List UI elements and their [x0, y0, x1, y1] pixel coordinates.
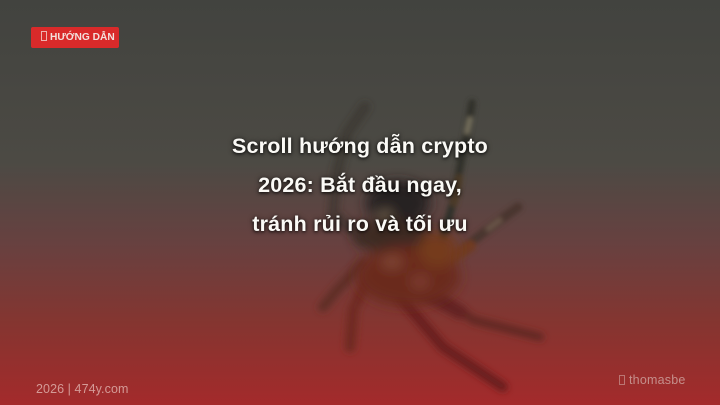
- source text: 2026 | 474y.com: [36, 382, 128, 396]
- author credit: thomasbe: [629, 373, 686, 387]
- title: Scroll hướng dẫn crypto: [232, 134, 488, 158]
- title: [231, 132, 490, 236]
- badge: HƯỚNG DẪN: [31, 27, 119, 48]
- title: 2026: Bắt đầu ngay,: [258, 173, 462, 197]
- title: tránh rủi ro và tối ưu: [252, 212, 468, 236]
- badge: HƯỚNG DẪN: HƯỚNG DẪN: [50, 32, 115, 43]
